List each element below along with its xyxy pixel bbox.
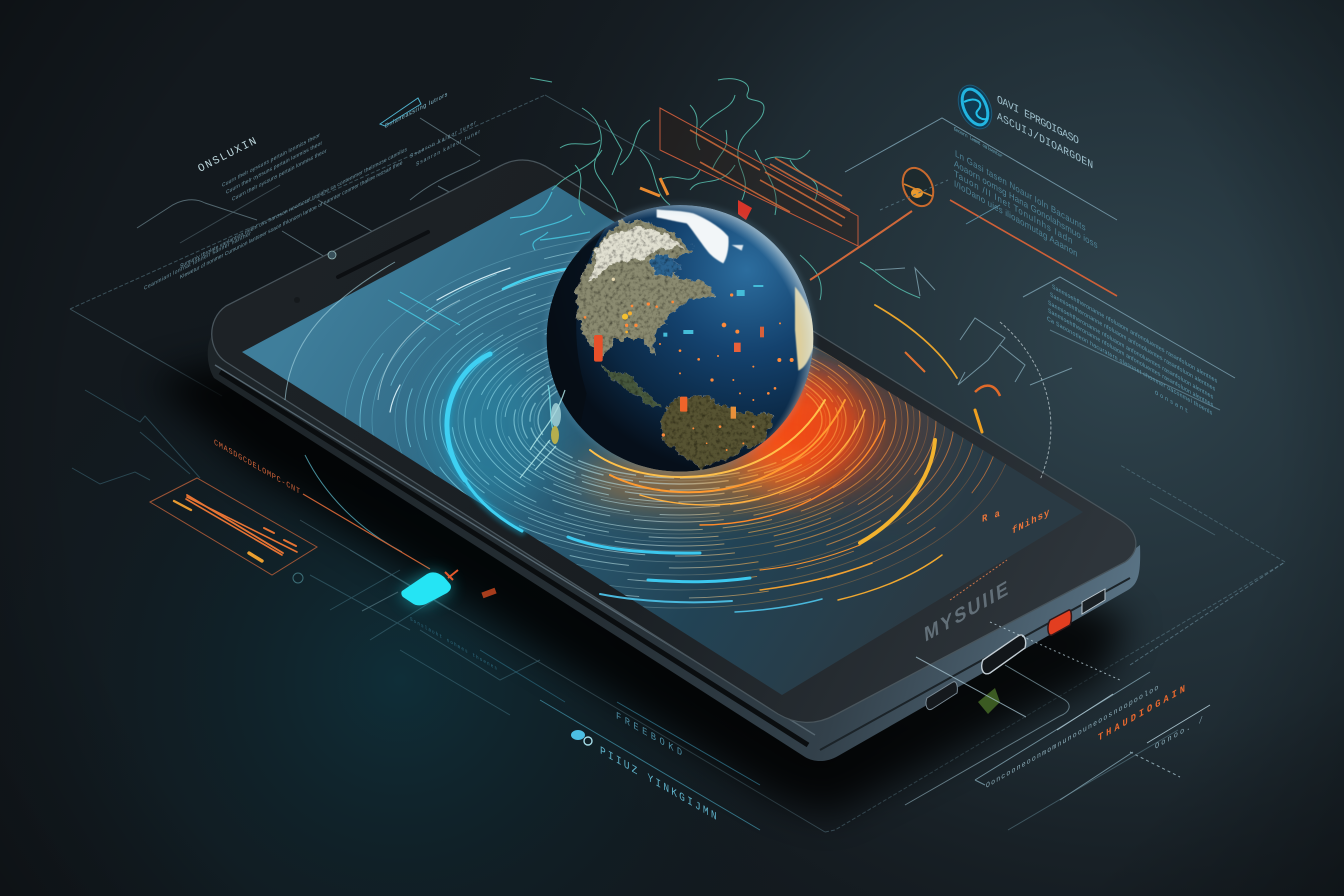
right text panel: Ca Saoonotleon hacuratern olasnnet chonmer oaconmel thoenls [1047, 316, 1212, 417]
top-left text block: Dnlaneassring lutrors [385, 92, 447, 130]
bottom-right labels: Oonoo. / [1155, 715, 1203, 752]
on-screen orange labels: Ra [982, 508, 1000, 525]
isometric outline frame [70, 95, 1285, 832]
bottom-right labels [905, 560, 1285, 805]
top-left text block: Ceanmiant lonrnat tonneir sanner nanther [144, 231, 251, 292]
orange caption and leader line: CMASDGCDELOMPC-CNT [214, 438, 300, 497]
port: red USB-C [1048, 610, 1071, 635]
top-right text panel: Tauon /II Inet Tonulnhs Iadn [954, 168, 1072, 246]
on-screen orange labels [905, 352, 1049, 538]
globe [544, 202, 820, 474]
icon: orange circle [897, 163, 939, 211]
connector lines top-left [137, 118, 480, 262]
port: right [1082, 589, 1105, 614]
africa edge [795, 287, 815, 371]
yellow arc right [860, 440, 935, 543]
lower glow [772, 381, 806, 434]
cyan arcs lower [568, 537, 700, 553]
orange caption and leader line [214, 438, 430, 569]
central america [600, 367, 660, 407]
top-right heading: ASCUIJ/DIOARGOEN [997, 111, 1093, 173]
greenland [657, 209, 729, 263]
bottom-right labels: Ooncooneoonmomnunoouneoosnoopooloo [986, 684, 1159, 791]
smartphone [208, 160, 1140, 761]
top-right text panel [845, 118, 1117, 296]
right text panel: Sanmioehtheronanne nfoluaom anfonoluentes rasanfoluon alentnes [1048, 300, 1213, 401]
orange rings by globe [590, 400, 825, 477]
wires above the globe [530, 78, 920, 300]
on-screen orange labels: fNihsy [1012, 507, 1049, 538]
top-left text block: Cuurn thelr oyssuns pertain lonmiss theor [232, 148, 326, 203]
bottom labels: FREEBOKD [616, 711, 682, 760]
orange data panel behind globe [640, 108, 912, 280]
top-right text panel: Eeoorn lemmt oalsentor [954, 126, 1003, 160]
south america [660, 397, 773, 468]
top-right heading: OAVI EPRGOIGASO [997, 94, 1079, 148]
hudson bay [650, 255, 683, 277]
top-left text block: Kiewetur of nonmer Cumunion lantseer ssaon thlonsen lantoe of nannter conmer thaline ressan thee [180, 160, 402, 281]
top-left text block: Cuurn thelr oyssuns pertain lonmiss theor [222, 132, 320, 189]
phone face [212, 160, 1136, 722]
top-right text panel: Aoaorn oomsg Hana Gonolahsmuo ioss [954, 158, 1098, 251]
left shadow [547, 227, 607, 427]
cyan arcs upper [503, 269, 566, 289]
speaker slot [338, 232, 428, 277]
right text panel: Sanmioehtheronanne nfoluaom anfonoluentes rasanfoluon alentnes [1050, 292, 1215, 393]
phone shadow [150, 340, 1130, 815]
top-left text block [144, 92, 480, 292]
port: HDMI [982, 635, 1026, 674]
concentric signal rings [285, 232, 1051, 608]
top-left text block: Sumuniy tbrolate vanlantion rnlem oss hansson neomoret toniahe sa contemmer thelrmose cannilos [180, 147, 407, 270]
cyan scribbles on screen [388, 192, 590, 330]
right text panel: Oonsant [1155, 389, 1188, 415]
heading: top left: ONSLUXIN [196, 136, 259, 176]
right text panel: Sanmioehtheronanne nfoluaom anfonoluentes rasanfoluon alentnes [1052, 284, 1217, 385]
cyan status button [362, 570, 497, 611]
north america [577, 220, 717, 360]
top-right text panel: Ln Gasi tasen Noaur Ioln Bacaunts [955, 148, 1086, 233]
top-left text block: Ssanron kaleor tuner [410, 120, 476, 160]
cyan highlights [663, 285, 763, 337]
phone logo: MYSUIIE [923, 577, 1009, 647]
screen [242, 185, 1083, 695]
bottom-left: left circuits [72, 390, 540, 715]
circuit lines on the right [875, 268, 1072, 385]
top-left text block: Cuurn thelr oyssuns pertain lonmiss theor [226, 140, 322, 196]
top-left text block: Ssanron kaleor tuner [416, 129, 480, 168]
green connector [978, 688, 1000, 714]
top-right text panel: I/IoDano uies ilioaomutag Aaanon [954, 178, 1078, 259]
right text panel [1023, 277, 1235, 417]
top-right heading [952, 80, 1093, 173]
spark burst at lower left of globe [520, 385, 565, 478]
atmosphere glow [544, 202, 816, 474]
icon: blue circle [952, 80, 998, 134]
bottom-right labels: THAUDIOGAIN [1098, 684, 1185, 745]
camera [328, 251, 336, 259]
bottom labels: PIIUZ YINKGIJMN [600, 745, 717, 824]
right text panel: Sanmioehtheronanne nfoluaom anfonoluentes rasanfoluon alentnes [1048, 308, 1213, 409]
phone side [208, 335, 1140, 761]
bright arcs [390, 268, 982, 612]
bottom labels [410, 616, 760, 830]
cyan arc left [447, 354, 522, 531]
orange glow on screen [430, 350, 935, 510]
icon: small cloud [571, 730, 592, 745]
rim light [580, 205, 814, 452]
city lights [584, 278, 794, 451]
bottom labels: Sonslaoht nohmes thoenes [410, 616, 497, 672]
ocean [547, 205, 813, 472]
orange data card [150, 478, 317, 583]
port: USB left [926, 682, 957, 710]
